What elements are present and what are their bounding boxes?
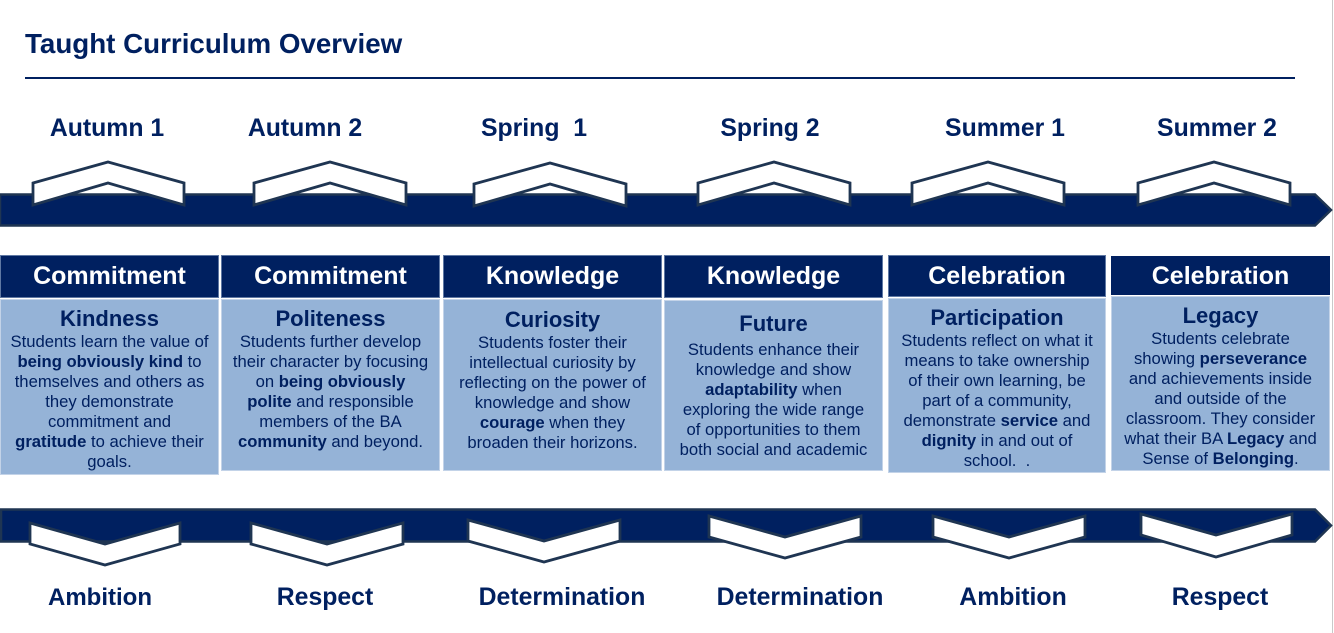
panel: Politeness: community and beyond. xyxy=(238,432,423,451)
panel: Participation: means to take ownership xyxy=(904,351,1090,370)
panel: Kindness: Students learn the value of xyxy=(10,332,208,351)
panel: Curiosity: Students foster their xyxy=(478,333,627,352)
panel header: Knowledge 1: Knowledge xyxy=(486,262,619,290)
heading: Autumn 2: Autumn 2 xyxy=(248,115,362,142)
panel: Politeness xyxy=(221,299,440,471)
chevron: Spring 1 xyxy=(474,163,626,206)
panel header: Commitment 2 xyxy=(221,255,440,298)
heading: Autumn 1: Autumn 1 xyxy=(50,115,164,142)
label: Respect 2: Respect xyxy=(1172,584,1268,611)
panel: Curiosity: intellectual curiosity by xyxy=(469,353,636,372)
panel: Legacy: what their BA Legacy and xyxy=(1124,429,1317,448)
arrow: bottom timeline xyxy=(1,510,1331,542)
panel: Kindness: themselves and others as xyxy=(15,372,204,391)
chevron: Autumn 2 xyxy=(254,162,406,205)
heading: Spring 1: Spring 1 xyxy=(481,115,587,142)
label: Respect 1: Respect xyxy=(277,584,373,611)
panel: Kindness xyxy=(0,299,219,475)
panel: Legacy: and achievements inside xyxy=(1129,369,1312,388)
panel: Politeness: their character by focusing xyxy=(233,352,428,371)
panel: Participation: of their own learning, be xyxy=(908,371,1086,390)
panel: Future: knowledge and show xyxy=(696,360,851,379)
chevron: Respect 2 xyxy=(1141,514,1292,557)
panel: Legacy: showing perseverance xyxy=(1134,349,1307,368)
panel: Future: Students enhance their xyxy=(688,340,859,359)
chevron: Summer 1 xyxy=(912,162,1064,205)
panel: Curiosity: reflecting on the power of xyxy=(459,373,646,392)
chevron: Respect 1 xyxy=(251,523,403,565)
chevron: Determination 1 xyxy=(468,520,620,562)
panel: Politeness: members of the BA xyxy=(259,412,402,431)
panel: Curiosity: Curiosity xyxy=(505,307,600,332)
label: Ambition 2: Ambition xyxy=(959,584,1067,611)
panel header: Celebration 2 xyxy=(1111,256,1330,295)
panel: Kindness: goals. xyxy=(87,452,132,471)
panel: Participation: part of a community, xyxy=(922,391,1072,410)
chevron: Autumn 1 xyxy=(33,162,184,205)
panel header: Celebration 1: Celebration xyxy=(928,262,1066,290)
panel: Legacy: Legacy xyxy=(1183,303,1258,328)
heading: Spring 2: Spring 2 xyxy=(720,115,820,142)
panel: Legacy xyxy=(1111,296,1330,471)
panel header: Knowledge 2 xyxy=(664,255,883,298)
top timeline arrow with chevrons xyxy=(0,160,1333,227)
panel: Curiosity: broaden their horizons. xyxy=(467,433,638,452)
panel: Legacy: classroom. They consider xyxy=(1126,409,1315,428)
panel: Future: adaptability when xyxy=(705,380,842,399)
chevron: Determination 2 xyxy=(709,516,861,558)
panel: Participation: Students reflect on what it xyxy=(901,331,1093,350)
panel header: Commitment 1 xyxy=(0,255,219,298)
label: Ambition 1: Ambition xyxy=(48,584,152,611)
panel: Participation xyxy=(888,298,1106,473)
panel: Kindness: they demonstrate xyxy=(45,392,174,411)
panel header: Celebration 1 xyxy=(888,255,1106,297)
heading: Summer 1: Summer 1 xyxy=(945,115,1065,142)
panel: Participation: Participation xyxy=(930,305,1064,330)
chevron: Ambition 1 xyxy=(30,523,180,565)
arrow: top timeline xyxy=(0,194,1331,226)
panel: Legacy: Students celebrate xyxy=(1151,329,1290,348)
title: Taught Curriculum Overview xyxy=(25,28,402,59)
panel: Future: both social and academic xyxy=(680,440,867,459)
panel: Future xyxy=(664,300,883,471)
panel: Future: Future xyxy=(739,311,808,336)
panel: Politeness: on being obviously xyxy=(256,372,405,391)
panel: Future: exploring the wide range xyxy=(683,400,864,419)
label: Determination 1: Determination xyxy=(479,584,645,611)
panel: Kindness: Kindness xyxy=(60,306,159,331)
panel: Legacy: and outside of the xyxy=(1154,389,1287,408)
chevron: Ambition 2 xyxy=(933,516,1085,558)
bottom timeline arrow with chevrons xyxy=(0,508,1333,566)
panel: Curiosity xyxy=(443,299,662,471)
panel header: Knowledge 1 xyxy=(443,255,662,298)
panel: Kindness: being obviously kind to xyxy=(17,352,202,371)
chevron: Spring 2 xyxy=(698,162,850,205)
panel: Kindness: commitment and xyxy=(48,412,171,431)
panel: Participation: school. . xyxy=(964,451,1030,470)
panel header: Commitment 1: Commitment xyxy=(33,262,186,290)
panel: Politeness: Students further develop xyxy=(240,332,421,351)
label: Determination 2: Determination xyxy=(717,584,883,611)
panel header: Celebration 2: Celebration xyxy=(1152,262,1289,290)
panel: Politeness: Politeness xyxy=(275,306,386,331)
panel header: Knowledge 2: Knowledge xyxy=(707,262,840,290)
panel: Curiosity: knowledge and show xyxy=(475,393,630,412)
panel: Participation: dignity in and out of xyxy=(922,431,1072,450)
panel: Curiosity: courage when they xyxy=(480,413,625,432)
panel: Future: of opportunities to them xyxy=(687,420,860,439)
panel: Legacy: Sense of Belonging. xyxy=(1142,449,1299,468)
panel: Participation: demonstrate service and xyxy=(904,411,1090,430)
heading: Summer 2: Summer 2 xyxy=(1157,115,1277,142)
panel: Kindness: gratitude to achieve their xyxy=(15,432,204,451)
chevron: Summer 2 xyxy=(1138,162,1290,205)
panel: Politeness: polite and responsible xyxy=(247,392,414,411)
panel header: Commitment 2: Commitment xyxy=(254,262,407,290)
